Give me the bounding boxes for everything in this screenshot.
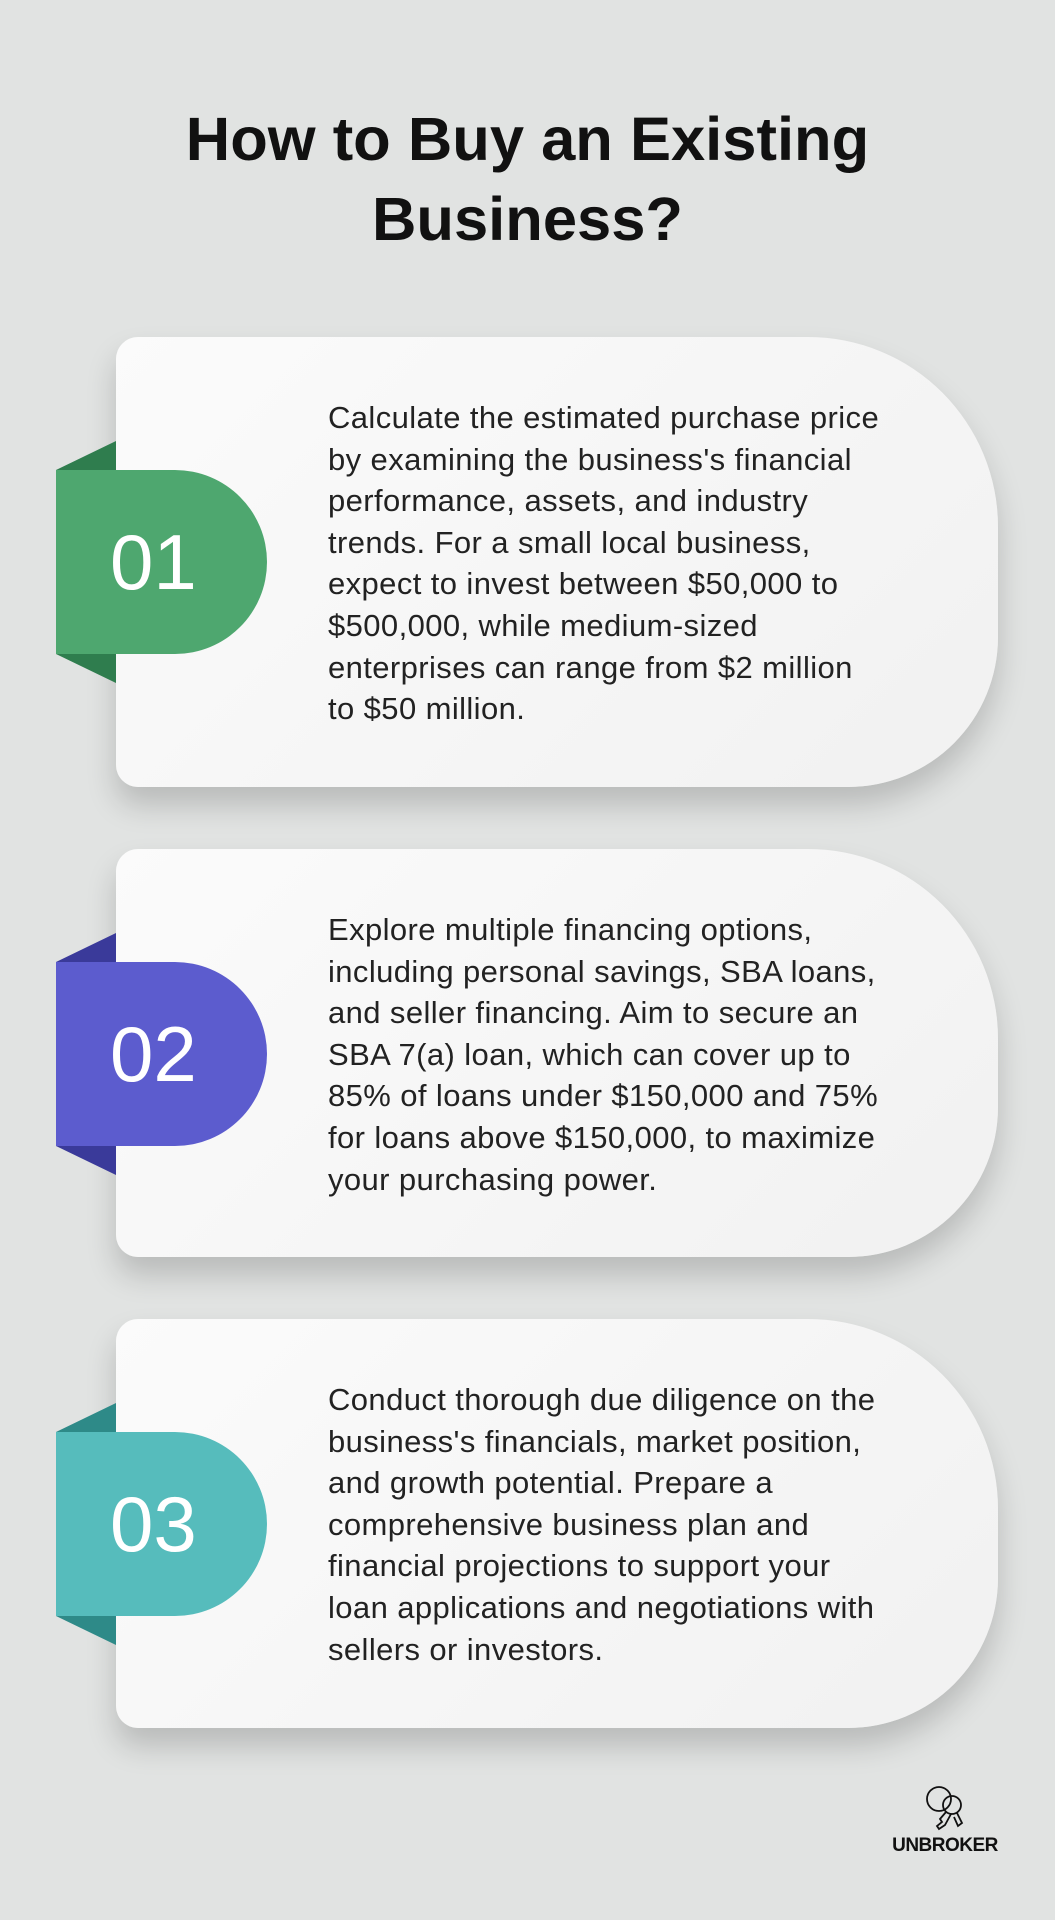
badge: 01: 01 xyxy=(110,518,197,606)
text: step 2: Explore multiple financing options, xyxy=(328,912,812,947)
text: step 3: financial projections to support your xyxy=(328,1548,830,1583)
logo: unbroker xyxy=(892,1786,998,1856)
text: step 1: enterprises can range from $2 million xyxy=(328,650,853,685)
badge: 02 xyxy=(56,962,267,1146)
text: step 3: sellers or investors. xyxy=(328,1632,603,1667)
badge: 03: 03 xyxy=(110,1480,197,1568)
text: step 3 xyxy=(328,1382,875,1667)
text: step 3: loan applications and negotiations with xyxy=(328,1590,874,1625)
text: step 1: Calculate the estimated purchase price xyxy=(328,400,879,435)
text: step 1: expect to invest between $50,000 to xyxy=(328,566,838,601)
text: step 2 xyxy=(328,912,878,1197)
text: step 2: 85% of loans under $150,000 and 75% xyxy=(328,1078,878,1113)
panel: step 1 xyxy=(116,337,998,787)
text: step 3: business's financials, market position, xyxy=(328,1424,861,1459)
title xyxy=(186,105,869,254)
fold: step 1 top xyxy=(56,441,116,470)
text: step 2: for loans above $150,000, to maximize xyxy=(328,1120,875,1155)
fold: step 1 bottom xyxy=(56,654,116,683)
title: How to Buy an Existing xyxy=(186,105,869,174)
title: Business? xyxy=(372,185,683,254)
text: step 1 xyxy=(328,400,879,726)
panel: step 3 xyxy=(116,1319,998,1728)
text: step 1: to $50 million. xyxy=(328,691,525,726)
text: step 1: $500,000, while medium-sized xyxy=(328,608,758,643)
badge: 01 xyxy=(56,470,267,654)
text: step 1: performance, assets, and industry xyxy=(328,483,808,518)
panel: step 2 xyxy=(116,849,998,1257)
badge: 02: 02 xyxy=(110,1010,197,1098)
text: step 3: Conduct thorough due diligence on the xyxy=(328,1382,875,1417)
fold: step 2 top xyxy=(56,933,116,962)
text: step 2: your purchasing power. xyxy=(328,1162,657,1197)
fold: step 3 top xyxy=(56,1403,116,1432)
fold: step 3 bottom xyxy=(56,1616,116,1645)
text: step 1: by examining the business's financial xyxy=(328,442,852,477)
badge: 03 xyxy=(56,1432,267,1616)
text: step 2: SBA 7(a) loan, which can cover up to xyxy=(328,1037,851,1072)
text: step 3: and growth potential. Prepare a xyxy=(328,1465,773,1500)
text: step 2: including personal savings, SBA loans, xyxy=(328,954,876,989)
text: step 3: comprehensive business plan and xyxy=(328,1507,809,1542)
text: step 1: trends. For a small local business, xyxy=(328,525,811,560)
text: UNBROKER: UNBROKER xyxy=(892,1835,998,1856)
icon: keys xyxy=(926,1786,964,1830)
fold: step 2 bottom xyxy=(56,1146,116,1175)
text: step 2: and seller financing. Aim to secure an xyxy=(328,995,858,1030)
